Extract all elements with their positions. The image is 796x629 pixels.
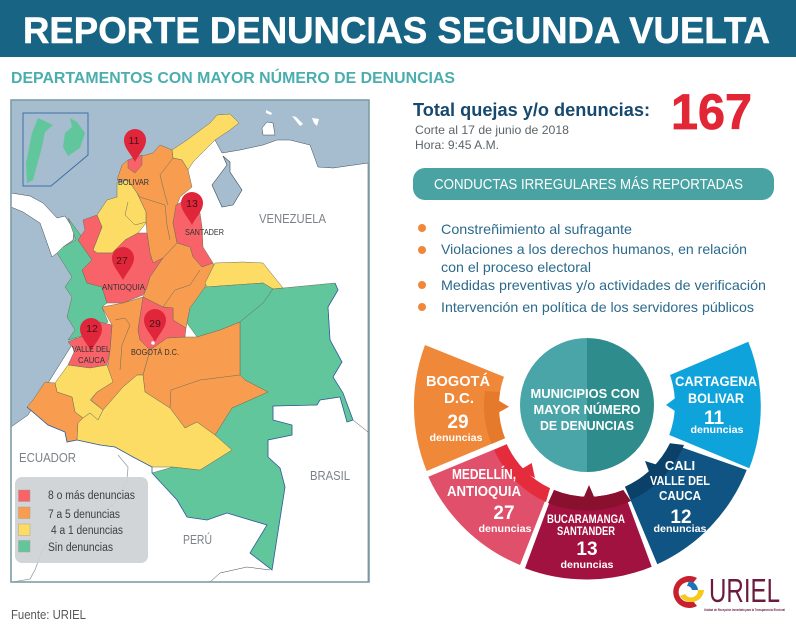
segment: Bogotá: denuncias <box>430 432 483 444</box>
segment: Bogotá <box>414 345 509 471</box>
segment: Bucaramanga: denuncias <box>560 559 614 571</box>
segment: Bogotá: D.C. <box>444 390 474 407</box>
map labels: BRASIL <box>310 468 350 483</box>
map labels: ECUADOR <box>19 450 76 465</box>
cut-off date text: Hora: 9:45 A.M. <box>415 138 499 152</box>
segment: Bogotá: 29 <box>447 412 469 433</box>
segment: Bogotá: BOGOTÁ <box>426 373 490 390</box>
total number 167: 167 <box>671 84 752 140</box>
map pin: Antioquia 27: 27 <box>116 255 128 267</box>
segment: Cali: 12 <box>670 507 692 528</box>
segment: Medellín: denuncias <box>478 523 532 535</box>
legend: 4 a 1 denuncias <box>51 525 123 537</box>
map pin: Bolívar 11: 11 <box>129 135 140 147</box>
bullet list: Constreñimiento al sufragante <box>441 221 632 237</box>
segment: Cartagena <box>666 342 761 468</box>
segment: Bucaramanga: BUCARAMANGA <box>547 514 625 526</box>
source note: Fuente: URIEL <box>11 607 86 622</box>
header pill: irregular conduct: CONDUCTAS IRREGULARES MÁS REPORTADAS <box>434 176 743 193</box>
map pin: Bogotá 29: 29 <box>149 318 161 330</box>
segment: Cali: denuncias <box>654 523 707 535</box>
center circle: municipalities heading: MAYOR NÚMERO <box>534 402 641 417</box>
cut-off date text: Corte al 17 de junio de 2018 <box>415 123 569 137</box>
segment: Medellín <box>428 444 550 565</box>
segment: Cartagena: 11 <box>704 408 724 429</box>
map pin: Bolívar 11 <box>124 129 146 162</box>
center circle: municipalities heading: DE DENUNCIAS <box>540 419 634 433</box>
department regions <box>27 114 353 570</box>
center circle: municipalities heading <box>520 338 654 472</box>
map pin: Valle del Cauca 12: 12 <box>86 323 98 335</box>
title banner <box>0 0 796 57</box>
map pin: Bogotá 29 <box>144 309 166 345</box>
legend <box>15 477 148 563</box>
map labels <box>19 177 350 547</box>
map labels: BOLIVAR <box>118 177 149 187</box>
map labels: CAUCA <box>78 355 105 365</box>
map labels: ANTIOQUIA <box>102 282 145 292</box>
bullet list: Violaciones a los derechos humanos, en relación <box>441 241 747 257</box>
cut-off date text <box>415 123 569 152</box>
segment: Bucaramanga <box>525 485 652 580</box>
map labels: SANTADER <box>185 227 224 237</box>
logo: URIEL <box>673 572 785 612</box>
map labels: VENEZUELA <box>259 211 326 226</box>
map pin: Valle del Cauca 12 <box>80 318 102 351</box>
bullet list <box>418 221 766 315</box>
legend: 7 a 5 denuncias <box>48 509 120 521</box>
bullet list: con el proceso electoral <box>441 259 591 275</box>
segment: Cali: CALI <box>665 458 695 473</box>
segment: Cartagena: CARTAGENA <box>675 374 757 389</box>
map pin: Antioquia 27 <box>112 247 134 280</box>
total complaints heading: Total quejas y/o denuncias: <box>413 100 650 120</box>
header pill: irregular conduct <box>413 168 774 200</box>
segment: Medellín: MEDELLÍN, <box>452 466 516 483</box>
map labels: BOGOTÁ D.C. <box>131 347 179 357</box>
bullet list: Medidas preventivas y/o actividades de verificación <box>441 277 766 293</box>
segment: Cali: VALLE DEL <box>650 473 710 488</box>
map labels: VALLE DEL <box>72 344 110 354</box>
map pin: Santander 13: 13 <box>186 198 198 210</box>
subtitle: departments heading: DEPARTAMENTOS CON MAYOR NÚMERO DE DENUNCIAS <box>11 68 455 87</box>
segment: Bucaramanga: 13 <box>576 539 598 560</box>
segment: Cartagena: BOLIVAR <box>688 391 744 406</box>
bullet list: Intervención en política de los servidores públicos <box>441 299 754 315</box>
map labels: PERÚ <box>183 532 212 547</box>
legend: 8 o más denuncias <box>48 490 135 502</box>
map pin: Santander 13 <box>181 192 203 225</box>
segment: Medellín: ANTIOQUIA <box>447 484 521 500</box>
panel: map of Colombia <box>11 100 369 582</box>
inset: San Andrés islands <box>23 113 88 186</box>
segment: Cali <box>625 443 747 564</box>
legend: Sin denuncias <box>48 542 113 554</box>
center circle: municipalities heading: MUNICIPIOS CON <box>530 387 640 401</box>
segment: Cali: CAUCA <box>659 488 702 503</box>
segment: Bucaramanga: SANTANDER <box>557 526 616 538</box>
segment: Medellín: 27 <box>493 503 515 524</box>
segment: Cartagena: denuncias <box>690 424 744 436</box>
title banner: REPORTE DENUNCIAS SEGUNDA VUELTA <box>23 10 770 51</box>
